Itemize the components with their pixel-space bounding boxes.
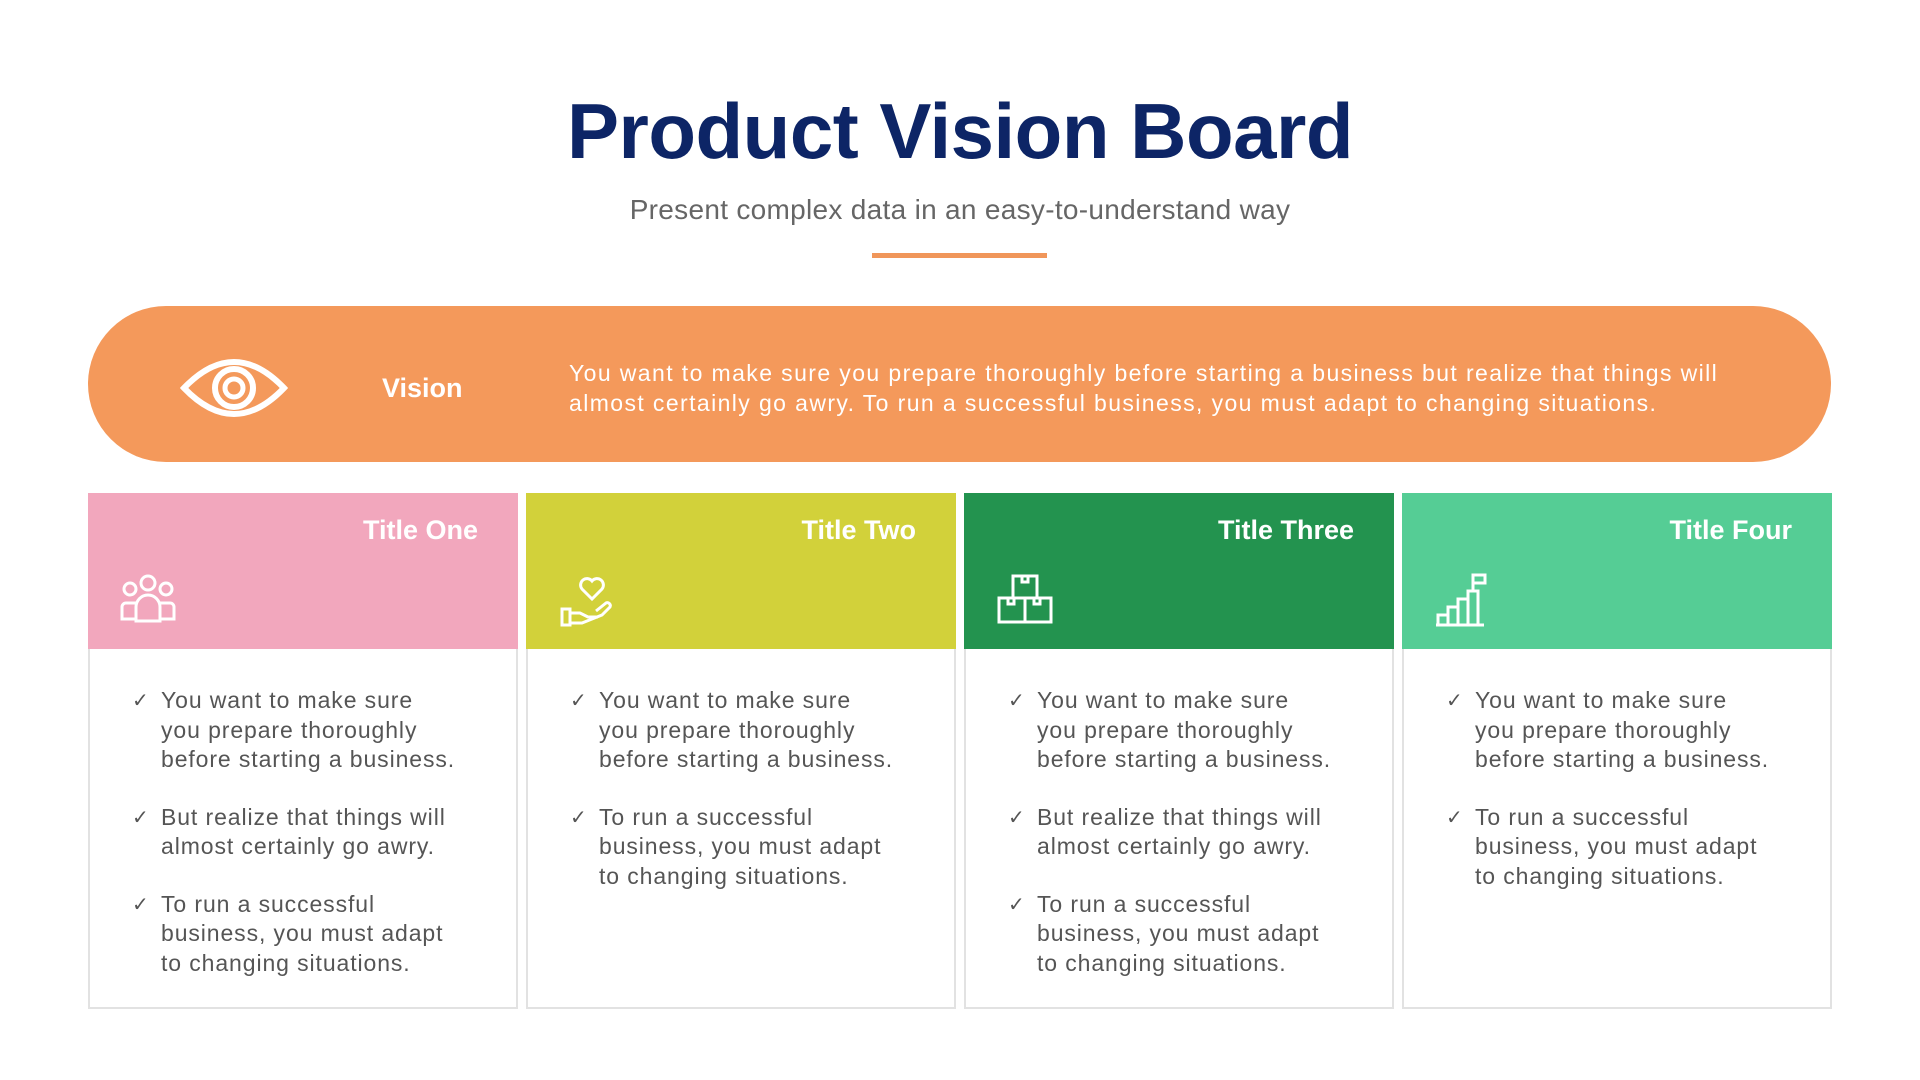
panel: title one: To run a successful [161,890,375,916]
panel: title three [964,493,1394,1009]
panel: title one: before starting a business. [161,746,455,772]
panel: title one: business, you must adapt [161,920,443,946]
panel: title four: To run a successful [1475,804,1689,830]
icon: growth steps [1436,574,1486,626]
vision text: You want to make sure you prepare thoroughly before starting a business but realize that things will [569,360,1718,386]
panel: title three: But realize that things will [1037,804,1322,830]
icon: heart hand [560,577,612,626]
panel: title three: Title Three [1218,515,1354,545]
vision text [569,360,1718,416]
vision label: Vision [382,373,463,403]
vision text: almost certainly go awry. To run a successful business, you must adapt to changing situations. [569,390,1657,416]
panel: vision [88,306,1831,462]
title: Product Vision Board [567,87,1353,175]
panel: title four: Title Four [1669,515,1792,545]
panel: title two [526,493,956,1009]
panel: title one: But realize that things will [161,804,446,830]
icon: eye [180,359,288,417]
panel: title one: to changing situations. [161,950,411,976]
panel: title four [1402,493,1832,1009]
panel: title three: To run a successful [1037,890,1251,916]
panel: title three: almost certainly go awry. [1037,833,1311,859]
panel: title three: business, you must adapt [1037,920,1319,946]
icon: boxes [998,574,1052,624]
subtitle: Present complex data in an easy-to-understand way [630,194,1290,225]
panel: title two: before starting a business. [599,746,893,772]
panel: title one: you prepare thoroughly [161,716,417,742]
panel: title four: before starting a business. [1475,746,1769,772]
panel: title two: Title Two [802,515,916,545]
panel: title three: You want to make sure [1037,687,1289,713]
panel: title one: Title One [363,515,478,545]
panel: title three: before starting a business. [1037,746,1331,772]
icon: people [120,574,176,622]
panel: title four: business, you must adapt [1475,833,1757,859]
panel: title three: to changing situations. [1037,950,1287,976]
panel: title four: You want to make sure [1475,687,1727,713]
panel: title two: to changing situations. [599,862,849,888]
panel: title two: business, you must adapt [599,833,881,859]
panel: title four: to changing situations. [1475,862,1725,888]
panel: title one: almost certainly go awry. [161,833,435,859]
panel: title two: you prepare thoroughly [599,716,855,742]
panel: title four: you prepare thoroughly [1475,716,1731,742]
panel: title two: To run a successful [599,804,813,830]
panel: title two: You want to make sure [599,687,851,713]
panel: title one: You want to make sure [161,687,413,713]
panel: title one [88,493,518,1009]
panel: title three: you prepare thoroughly [1037,716,1293,742]
